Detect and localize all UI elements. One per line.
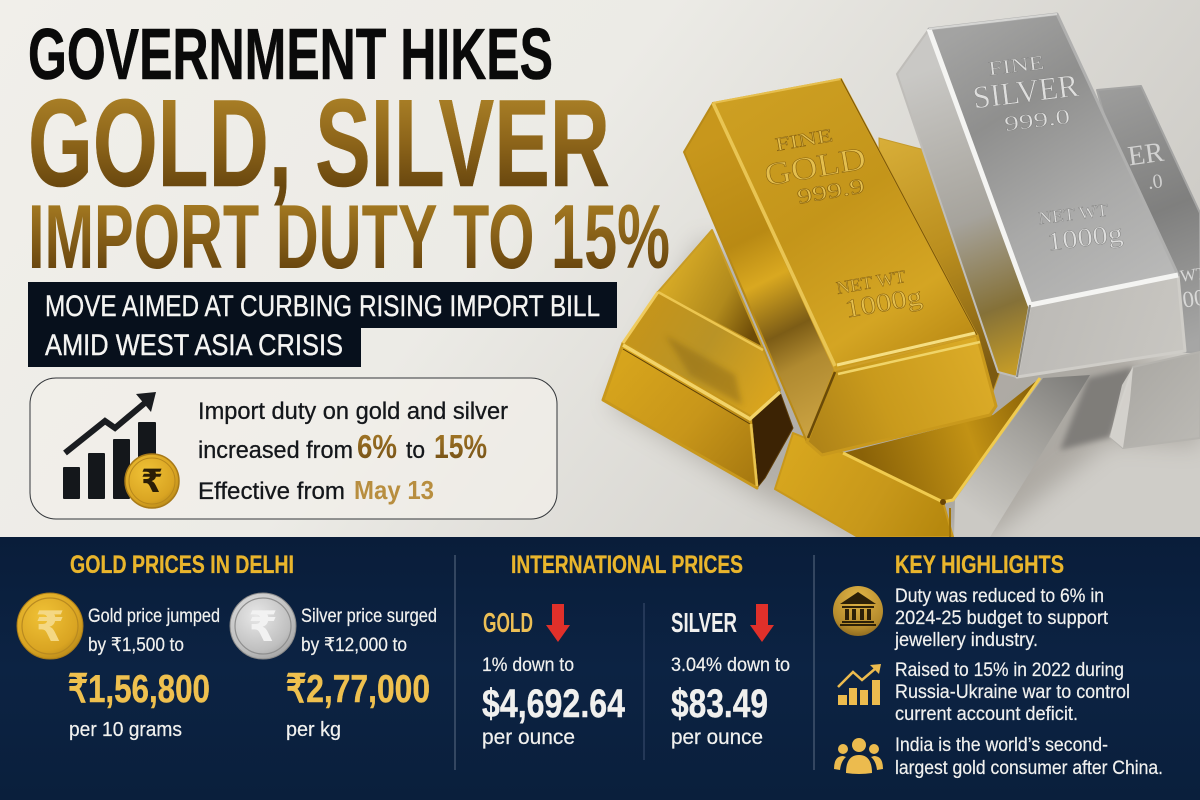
highlight text 3: largest gold consumer after China.	[895, 758, 1163, 779]
embossed gold text	[762, 125, 924, 324]
highlight text 3	[895, 735, 1163, 779]
photo: stacked gold and silver bars	[603, 14, 1200, 537]
gold international price: 1% down to	[482, 655, 574, 676]
highlight text 1: 2024-25 budget to support	[895, 608, 1109, 629]
highlight text 2: Russia-Ukraine war to control	[895, 682, 1130, 703]
silver bar at back right: ER	[1126, 137, 1166, 172]
main silver bar	[897, 14, 1185, 377]
gold price text: per 10 grams	[69, 719, 182, 741]
gold price text: Gold price jumped	[88, 606, 220, 627]
embossed silver text: NET WT	[1037, 200, 1109, 228]
silver price text: by ₹12,000 to	[301, 635, 407, 656]
icon: rising chart	[838, 664, 881, 705]
gold international price	[482, 604, 626, 749]
silver international price: SILVER	[671, 607, 737, 638]
silver price text: per kg	[286, 719, 341, 741]
icon: red down arrow	[546, 604, 570, 642]
gold bar behind	[879, 138, 1000, 400]
title line 2: GOLD, SILVER	[28, 75, 610, 213]
icon: rising bar chart with rupee coin: ₹	[141, 463, 163, 499]
title line 3: IMPORT DUTY TO 15%	[28, 187, 670, 288]
subtitle banner: MOVE AIMED AT CURBING RISING IMPORT BILL	[45, 290, 600, 323]
highlight text 1	[894, 586, 1109, 651]
icon: silver rupee coin	[230, 593, 296, 659]
callout text: increased from	[198, 437, 353, 464]
gold price text: ₹1,56,800	[68, 668, 210, 711]
silver price text: Silver price surged	[301, 606, 437, 627]
icon: people group	[834, 738, 883, 774]
background	[0, 0, 1200, 540]
embossed silver text: 999.0	[1003, 104, 1071, 136]
embossed silver text	[971, 52, 1124, 257]
subtitle banner: AMID WEST ASIA CRISIS	[45, 329, 343, 362]
highlight text 3: India is the world’s second-	[895, 735, 1108, 756]
embossed silver text: 1000g	[1045, 219, 1124, 257]
callout text	[198, 398, 508, 505]
silver bar at back right	[1060, 86, 1200, 450]
silver international price	[671, 604, 790, 749]
embossed silver text: FINE	[987, 52, 1045, 80]
silver price text	[286, 606, 437, 741]
silver price text: ₹2,77,000	[286, 668, 430, 711]
callout text: Import duty on gold and silver	[198, 398, 508, 425]
highlight text 2: Raised to 15% in 2022 during	[895, 660, 1124, 681]
highlight text 2	[895, 660, 1130, 725]
heading: GOLD PRICES IN DELHI	[70, 551, 294, 579]
silver international price: $83.49	[671, 682, 768, 726]
gold international price: GOLD	[483, 607, 533, 638]
embossed silver text: SILVER	[971, 67, 1081, 115]
embossed gold text: NET WT	[835, 266, 907, 298]
callout text: to	[406, 437, 425, 464]
gold bar at lower left	[603, 230, 793, 488]
embossed gold text: 1000g	[843, 282, 924, 324]
gold international price: per ounce	[482, 726, 575, 749]
callout text: Effective from	[198, 478, 345, 505]
bottom band	[0, 537, 1200, 800]
title line 1: GOVERNMENT HIKES	[28, 15, 553, 95]
panel: key highlights	[833, 551, 1163, 779]
silver international price: per ounce	[671, 726, 763, 749]
heading: INTERNATIONAL PRICES	[511, 551, 743, 579]
panel: import duty callout	[30, 378, 557, 519]
embossed gold text: FINE	[774, 125, 834, 156]
icon: red down arrow	[750, 604, 774, 642]
panel: gold prices in Delhi	[17, 551, 437, 741]
main gold bar	[684, 79, 996, 455]
highlight text 1: Duty was reduced to 6% in	[895, 586, 1104, 607]
silver and gold bar at the bottom	[775, 375, 1090, 537]
gold international price: $4,692.64	[482, 682, 626, 726]
subtitle banner	[28, 282, 617, 367]
heading: KEY HIGHLIGHTS	[895, 551, 1064, 579]
callout text: May 13	[354, 475, 434, 505]
callout text: 15%	[434, 428, 487, 465]
icon: gold rupee coin: ₹	[35, 603, 65, 650]
callout text: 6%	[357, 428, 397, 465]
highlight text 1: jewellery industry.	[894, 630, 1038, 651]
icon: rising bar chart with rupee coin	[63, 392, 179, 508]
gold price text	[68, 606, 220, 741]
icon: bank building	[833, 586, 883, 636]
silver bar at back right: .0	[1146, 170, 1164, 194]
title	[28, 15, 670, 288]
highlight text 2: current account deficit.	[895, 704, 1078, 725]
silver international price: 3.04% down to	[671, 655, 790, 676]
panel: international prices	[482, 551, 790, 749]
icon: gold rupee coin	[17, 593, 83, 659]
icon: silver rupee coin: ₹	[248, 603, 278, 650]
gold price text: by ₹1,500 to	[88, 635, 184, 656]
embossed gold text: 999.9	[795, 173, 866, 209]
embossed gold text: GOLD	[762, 140, 868, 193]
